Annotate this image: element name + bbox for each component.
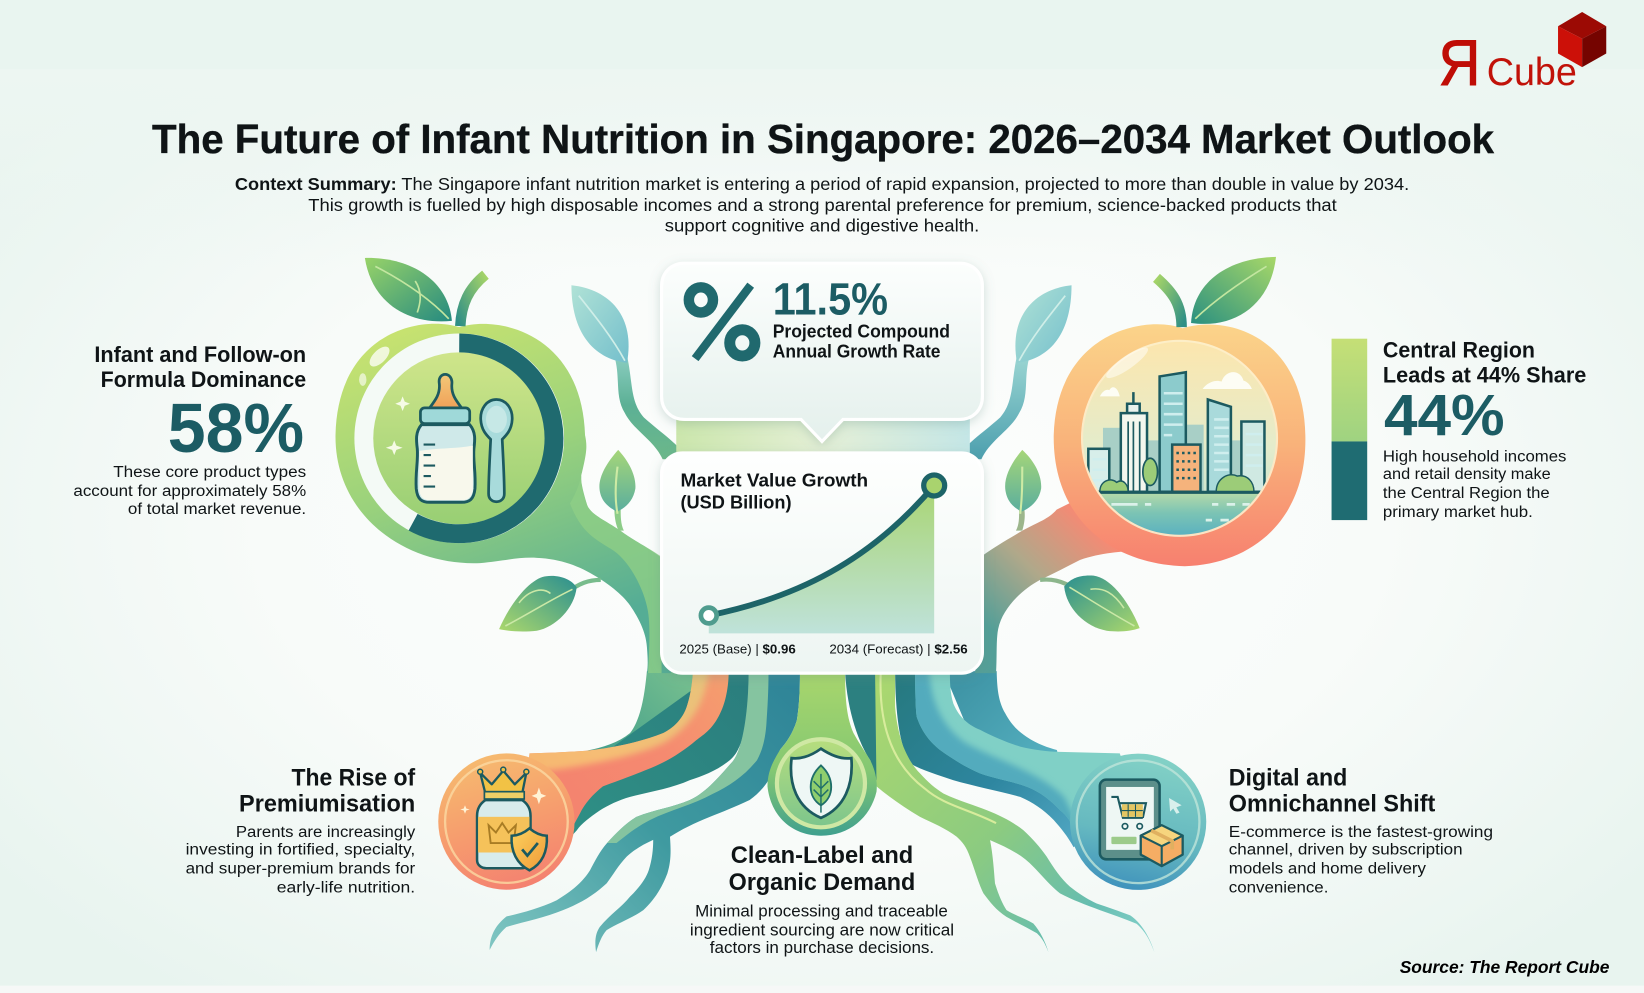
text block: premiumisation: Parents are increasingly [236,824,415,841]
text block: premiumisation: The Rise of [291,764,416,791]
text block: premiumisation: and super-premium brands for [186,860,415,877]
text block: digital shift: Digital and [1229,764,1347,791]
leaf: small left upper [599,450,635,531]
card: CAGR callout [662,263,982,441]
left coral band [524,671,729,840]
text block: clean label: Clean-Label and [731,842,913,869]
right blue band [915,671,1143,834]
context summary: support cognitive and digestive health. [665,216,979,236]
context summary [235,174,1409,236]
caption: Projected Compound [773,321,950,342]
text block: formula dominance: of total market revenue. [128,501,306,518]
text block: central region: High household incomes [1383,448,1567,465]
text block: digital shift: convenience. [1229,879,1328,896]
text block: clean label [690,842,954,957]
text block: formula dominance: 58% [168,389,304,467]
icon: organic leaf shield [775,737,867,829]
chart heading: (USD Billion) [680,492,792,513]
text block: formula dominance [73,342,306,518]
text block: formula dominance: Infant and Follow-on [94,342,306,367]
label: 2025 base: 2025 (Base) | $0.96 [679,641,796,656]
text block: digital shift [1229,764,1493,896]
text block: central region: 44% [1384,383,1505,448]
icon: premium jar with crown and shield [445,760,568,883]
stem and leaf: right apple [1156,257,1276,327]
text block: central region: Central Region [1383,338,1535,363]
trunk and apple: left [335,324,671,673]
donut chart: 58% with bottle [354,333,564,543]
icon: baby bottle [416,374,475,502]
icon: red cube [1558,12,1606,67]
icon: percent [689,285,755,359]
text block: clean label: ingredient sourcing are now critical [690,921,954,939]
context summary: Context Summary: The Singapore infant nutrition market is entering a period of rapid expansion, projected to more than double in value by 2034. [235,174,1409,194]
text block: digital shift: E-commerce is the fastest-growing [1229,824,1493,841]
chart heading: Market Value Growth [680,470,868,491]
card: market value growth chart [662,453,982,673]
title: The Future of Infant Nutrition in Singapore: 2026–2034 Market Outlook [152,116,1494,162]
text block: formula dominance: These core product types [113,464,306,481]
roots: right side [845,661,1206,952]
vine and leaf: upper right [956,285,1072,459]
text block: central region: and retail density make [1383,466,1551,483]
text block: premiumisation [186,764,416,896]
text block: digital shift: models and home delivery [1229,860,1426,877]
city skyline illustration [1080,340,1279,544]
leaf: small right upper [1005,450,1041,531]
clouds [1100,372,1252,396]
text block: clean label: Organic Demand [729,869,915,896]
text block: formula dominance: Formula Dominance [101,367,306,392]
trunk: right [975,493,1140,673]
text block: digital shift: channel, driven by subscription [1229,842,1463,859]
vine and leaf: upper left [571,285,688,459]
logo: RCube: Я [1438,26,1480,99]
icon: spoon [481,400,512,502]
roots: left side [438,661,800,952]
right green root [875,671,1154,952]
logo: RCube: Cube [1487,51,1577,94]
leaf: small left lower [499,576,601,631]
bar: 44% share [1332,339,1367,520]
chart heading [680,470,868,513]
value: 11.5%: 11.5% [773,274,888,325]
text block: premiumisation: investing in fortified, specialty, [186,842,415,859]
band between cards [676,414,970,460]
text block: central region: primary market hub. [1383,504,1533,521]
text block: clean label: Minimal processing and traceable [695,902,948,920]
text block: formula dominance: account for approximately 58% [73,483,306,500]
text block: central region: the Central Region the [1383,485,1550,502]
logo: RCube [1438,12,1606,99]
left green root [490,671,800,952]
apple: right [1054,324,1305,566]
context summary: This growth is fuelled by high disposable incomes and a strong parental preference for premium, science-backed products that [308,195,1337,215]
source note: Source: The Report Cube [1400,957,1609,977]
text block: premiumisation: early-life nutrition. [277,879,415,896]
area chart [701,475,945,633]
pale background towers [1103,425,1245,492]
leaf: small right lower [1040,576,1140,631]
text block: premiumisation: Premiumisation [239,791,415,818]
text block: clean label: factors in purchase decisions. [710,939,934,957]
text block: digital shift: Omnichannel Shift [1229,791,1435,818]
caption [773,321,950,362]
center root node [767,671,877,836]
icon: tablet, cart and parcel [1077,760,1199,883]
caption: Annual Growth Rate [773,341,940,362]
label: 2034 forecast: 2034 (Forecast) | $2.56 [829,641,968,656]
text block: central region: Leads at 44% Share [1383,363,1586,388]
text block: central region [1383,338,1586,521]
stem and leaf: left apple [365,258,485,326]
